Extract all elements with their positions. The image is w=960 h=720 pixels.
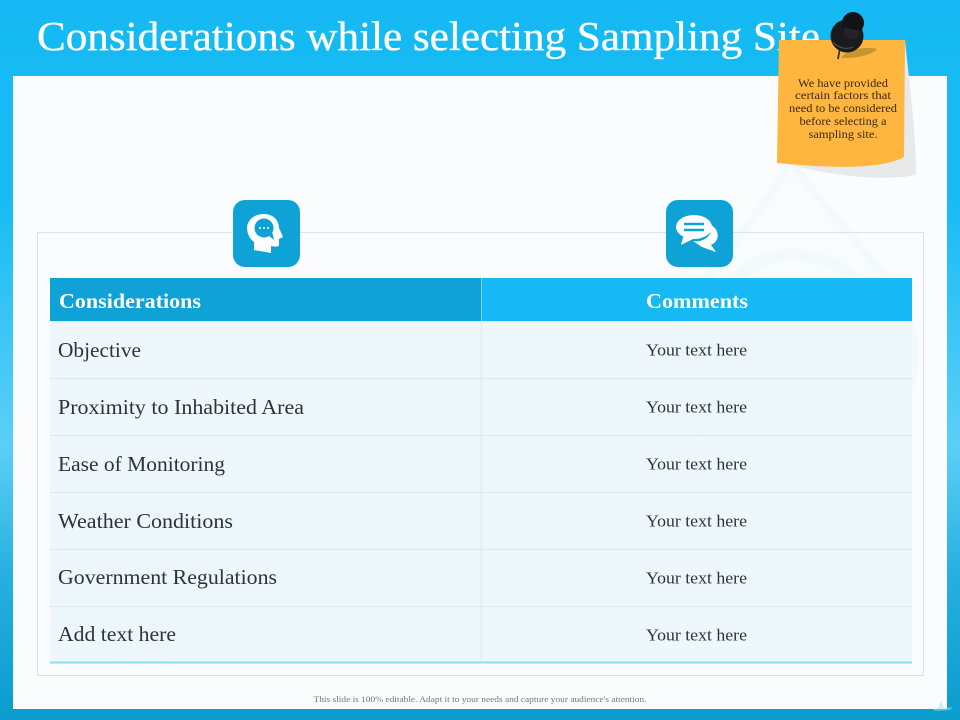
note text: need to be considered: [789, 103, 897, 115]
icon: push pin: [830, 12, 877, 59]
row 6: [58, 622, 747, 646]
icon: head with speech bubble: [233, 200, 300, 267]
watermark: water drop right: [670, 160, 915, 462]
row 1: [58, 338, 747, 362]
row 5: [58, 565, 747, 589]
row 6: Your text here: [646, 626, 747, 644]
footer note: This slide is 100% editable. Adapt it to your needs and capture your audience's attention.: [314, 694, 646, 704]
row 4: Weather Conditions: [58, 509, 233, 533]
title: Considerations while selecting Sampling Site: [37, 13, 820, 59]
row 3: [58, 452, 747, 476]
row 4: Your text here: [646, 512, 747, 530]
row 1: Your text here: [646, 340, 747, 360]
header: Comments: [482, 278, 912, 321]
table frame: [38, 232, 924, 676]
row 2: [58, 395, 747, 419]
row 6: Add text here: [58, 622, 176, 646]
row 5: Your text here: [646, 568, 747, 588]
header: Comments: Comments: [646, 289, 748, 313]
note text: sampling site.: [808, 129, 878, 141]
sticky note: [777, 12, 916, 178]
row 1: Objective: [58, 338, 141, 362]
note text: We have provided: [798, 78, 888, 90]
small logo mark: [933, 701, 953, 711]
table: [50, 278, 912, 663]
row 4: [58, 509, 747, 533]
row 2: Your text here: [646, 398, 747, 416]
note text: [789, 78, 897, 141]
row 2: Proximity to Inhabited Area: [58, 395, 305, 419]
note shadow: [780, 40, 916, 178]
table body background: [50, 322, 912, 663]
note text: before selecting a: [800, 116, 886, 128]
note text: certain factors that: [795, 90, 892, 102]
note paper: [777, 40, 905, 167]
icon: speech bubbles: [666, 200, 733, 267]
row 3: Your text here: [646, 454, 747, 474]
watermark: water drop left: [55, 465, 222, 658]
header: Considerations: [50, 278, 481, 321]
row 5: Government Regulations: [58, 565, 277, 589]
header: Considerations: Considerations: [59, 289, 201, 313]
row 3: Ease of Monitoring: [58, 452, 226, 476]
